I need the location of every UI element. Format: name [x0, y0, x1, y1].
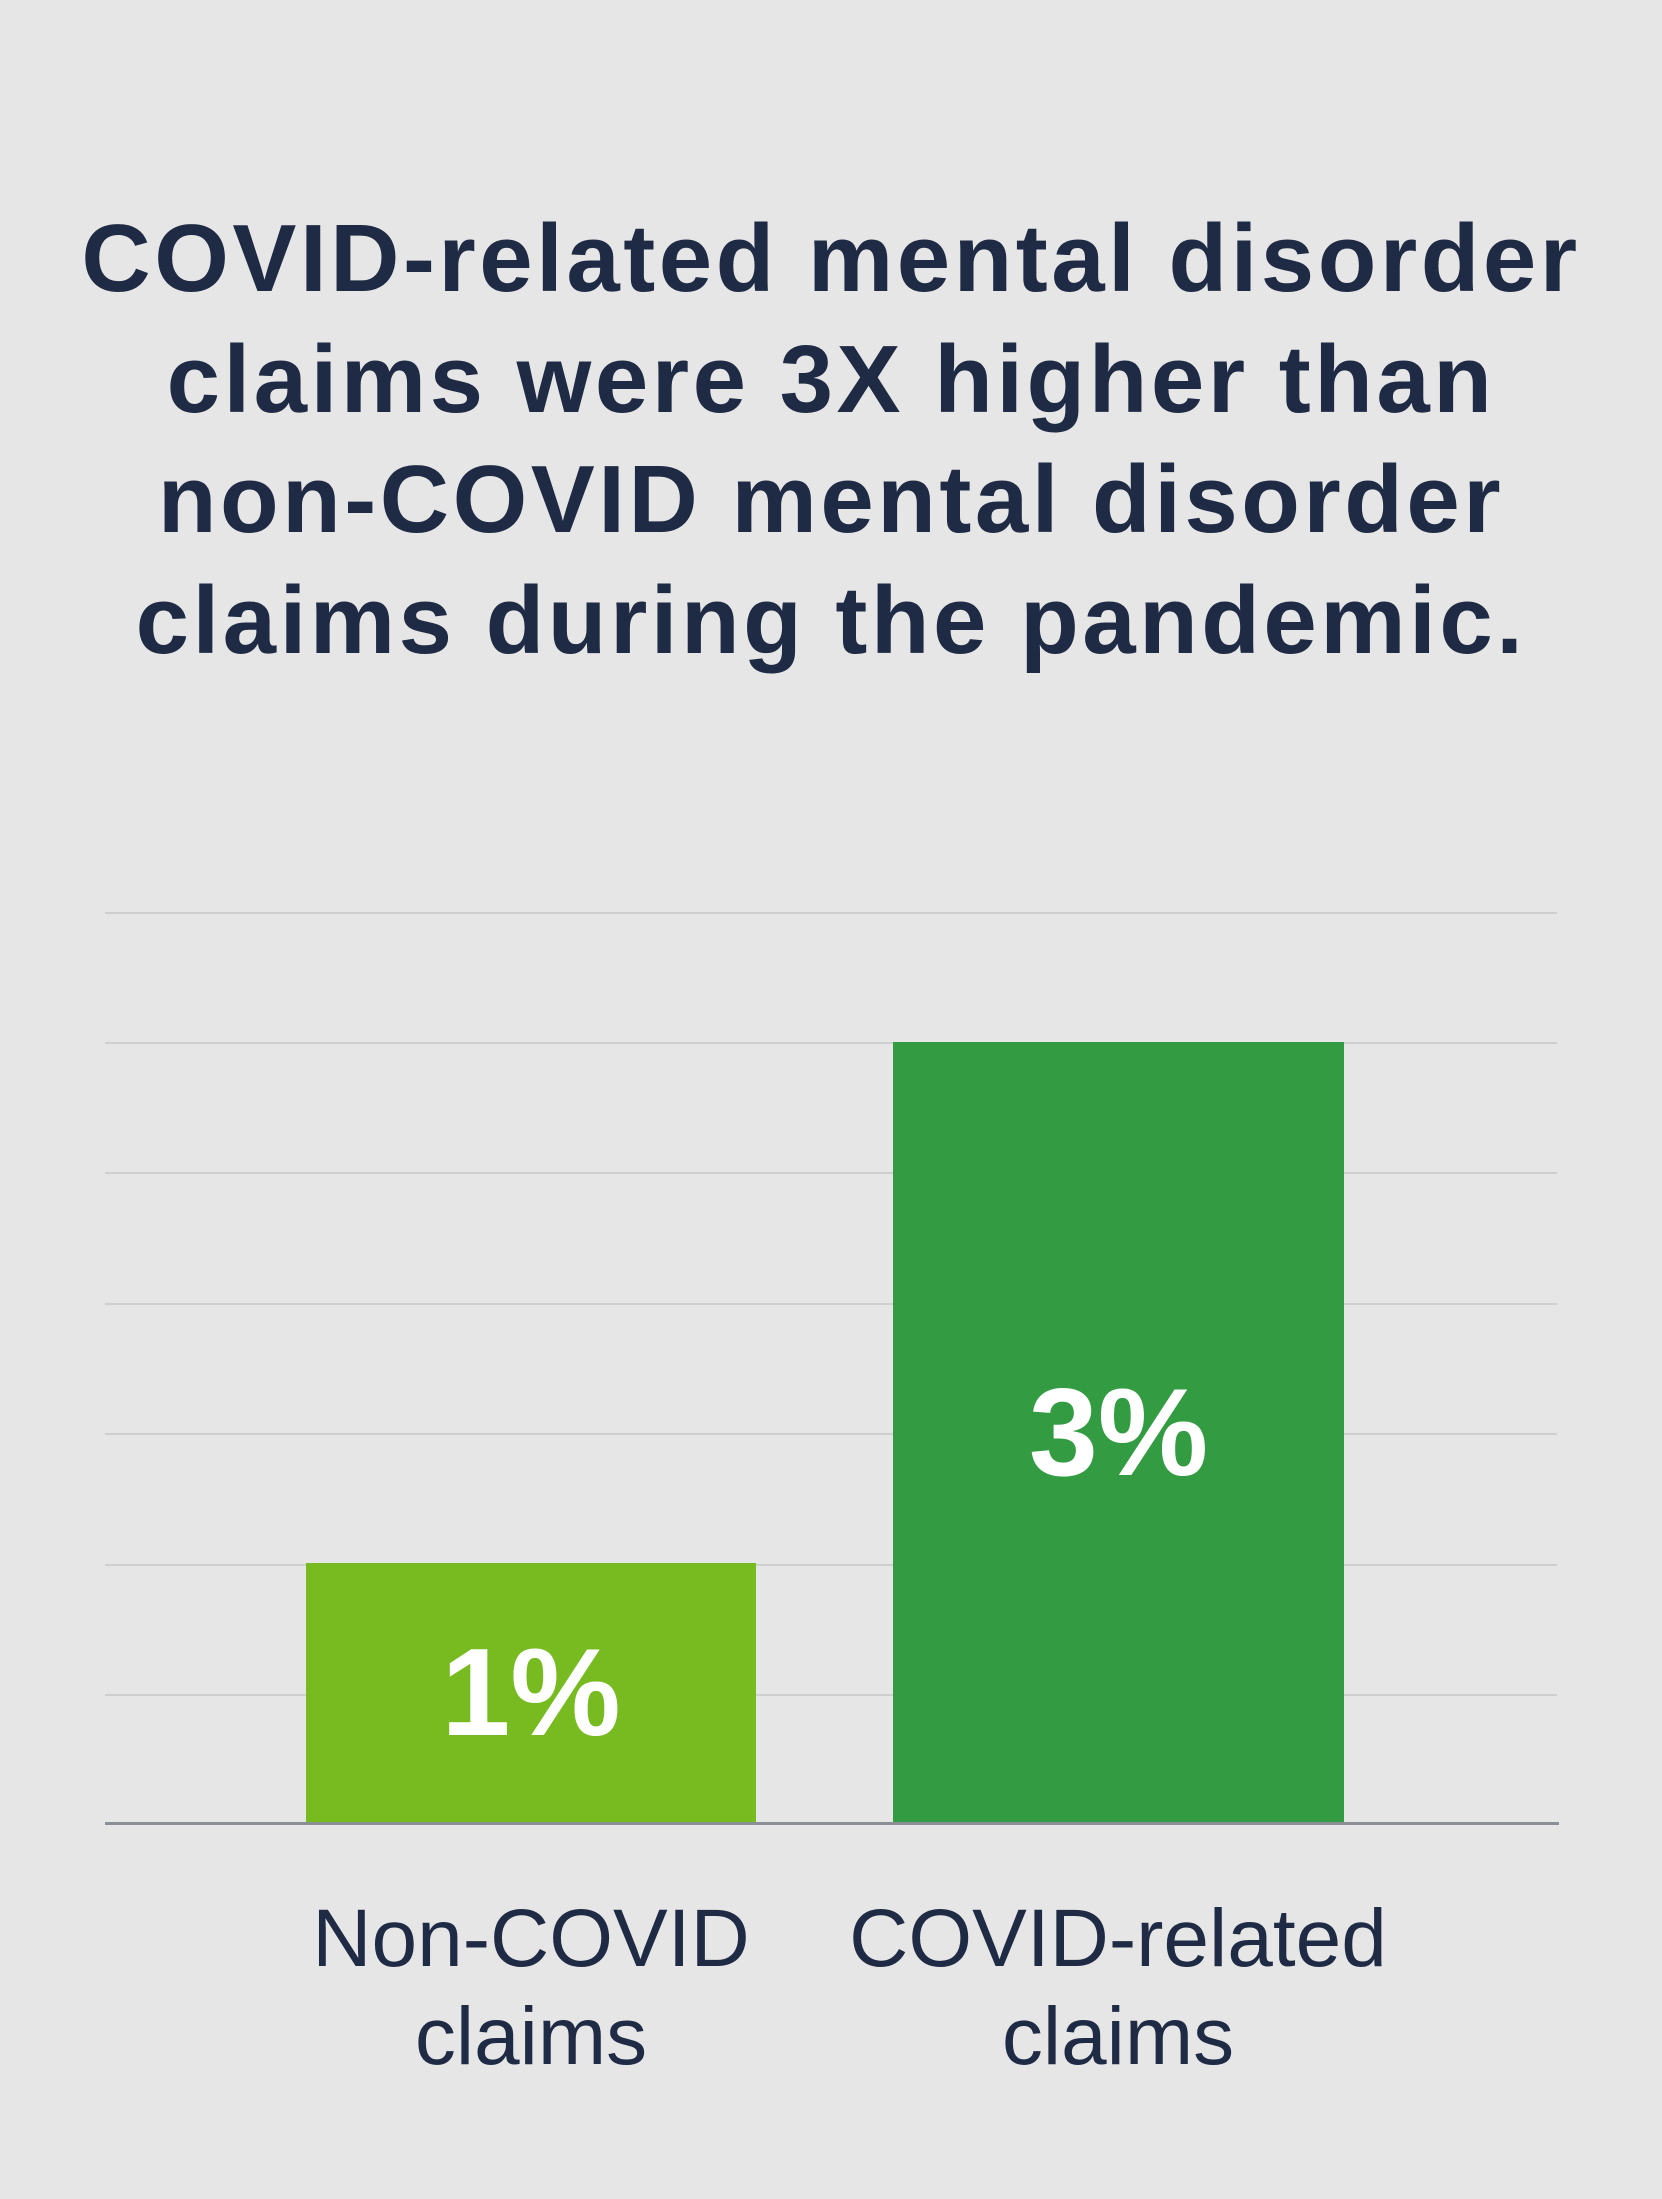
title: [81, 205, 1581, 674]
label: COVID-related claims: claims: [1002, 1991, 1234, 2082]
label: non-COVID claims: Non-COVID: [312, 1893, 750, 1984]
bar: COVID-related 3%: [893, 1042, 1344, 1823]
title: non-COVID mental disorder: [158, 446, 1504, 553]
label: non-COVID claims: [312, 1893, 750, 2082]
x axis: [105, 1822, 1559, 1825]
label: non-COVID claims: claims: [415, 1991, 647, 2082]
bar: non-COVID 1%: 1%: [441, 1624, 621, 1762]
label: COVID-related claims: COVID-related: [849, 1893, 1387, 1984]
title: claims during the pandemic.: [136, 566, 1526, 674]
bar chart: [105, 912, 1557, 1822]
label: COVID-related claims: [849, 1893, 1387, 2082]
bar: COVID-related 3%: 3%: [1029, 1364, 1208, 1502]
title: COVID-related mental disorder: [81, 205, 1581, 312]
title: claims were 3X higher than: [167, 326, 1495, 432]
bar: non-COVID 1%: [306, 1563, 756, 1823]
